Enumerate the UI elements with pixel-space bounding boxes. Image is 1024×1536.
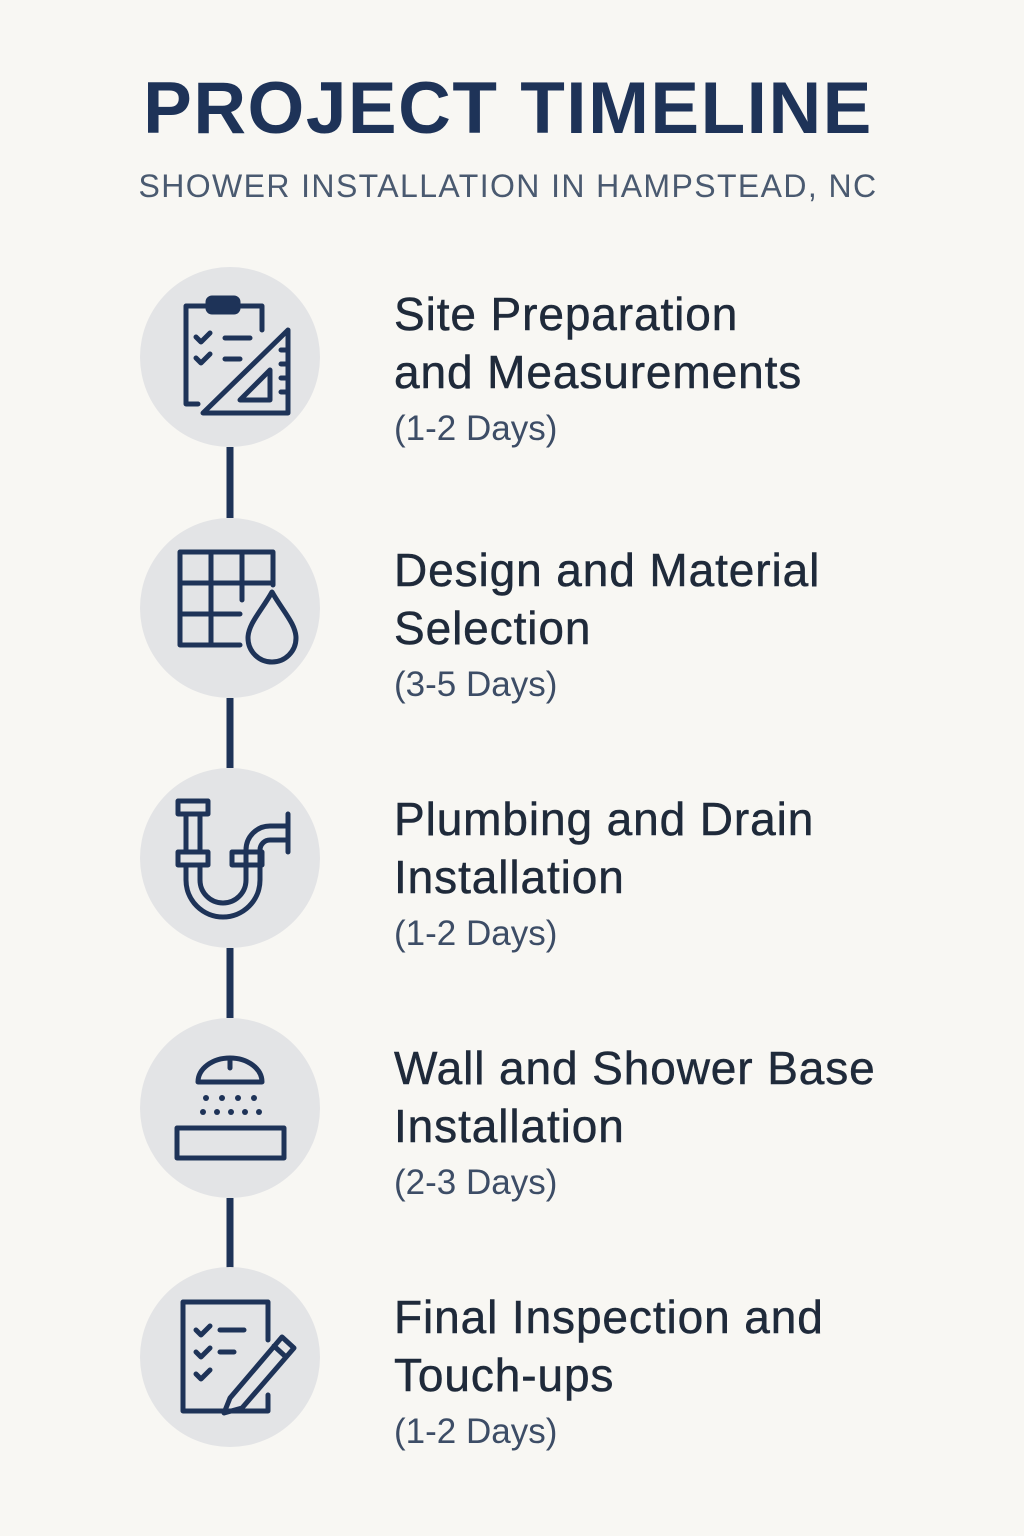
- step 2 text: (3-5 Days): [394, 665, 557, 704]
- step 4 text: Installation: [394, 1100, 625, 1152]
- step 3 text: (1-2 Days): [394, 914, 557, 953]
- step 3 text: Installation: [394, 851, 625, 903]
- title: PROJECT TIMELINE: [143, 68, 873, 149]
- step 4 text: [394, 1042, 876, 1202]
- icon: shower head and base: [140, 1018, 320, 1198]
- icon: clipboard and set square: [140, 267, 320, 447]
- step 4 text: Wall and Shower Base: [394, 1042, 876, 1094]
- step 1 text: [394, 288, 802, 448]
- connector lines: [226, 447, 234, 1268]
- step 5 text: Touch-ups: [394, 1349, 614, 1401]
- step 3 text: Plumbing and Drain: [394, 793, 814, 845]
- icon: checklist and pencil: [140, 1267, 320, 1447]
- icon: tiles and drop: [140, 518, 320, 698]
- step 2 text: Selection: [394, 602, 591, 654]
- step 3 text: [394, 793, 814, 953]
- step 1 text: Site Preparation: [394, 288, 738, 340]
- step 2 text: [394, 544, 820, 704]
- step 5 text: (1-2 Days): [394, 1412, 557, 1451]
- subtitle: SHOWER INSTALLATION IN HAMPSTEAD, NC: [138, 168, 878, 204]
- step 4 text: (2-3 Days): [394, 1163, 557, 1202]
- icon: pipe: [140, 768, 320, 948]
- step 1 text: (1-2 Days): [394, 409, 557, 448]
- step 5 text: [394, 1291, 824, 1451]
- step 5 text: Final Inspection and: [394, 1291, 824, 1343]
- step 2 text: Design and Material: [394, 544, 820, 596]
- step 1 text: and Measurements: [394, 346, 802, 398]
